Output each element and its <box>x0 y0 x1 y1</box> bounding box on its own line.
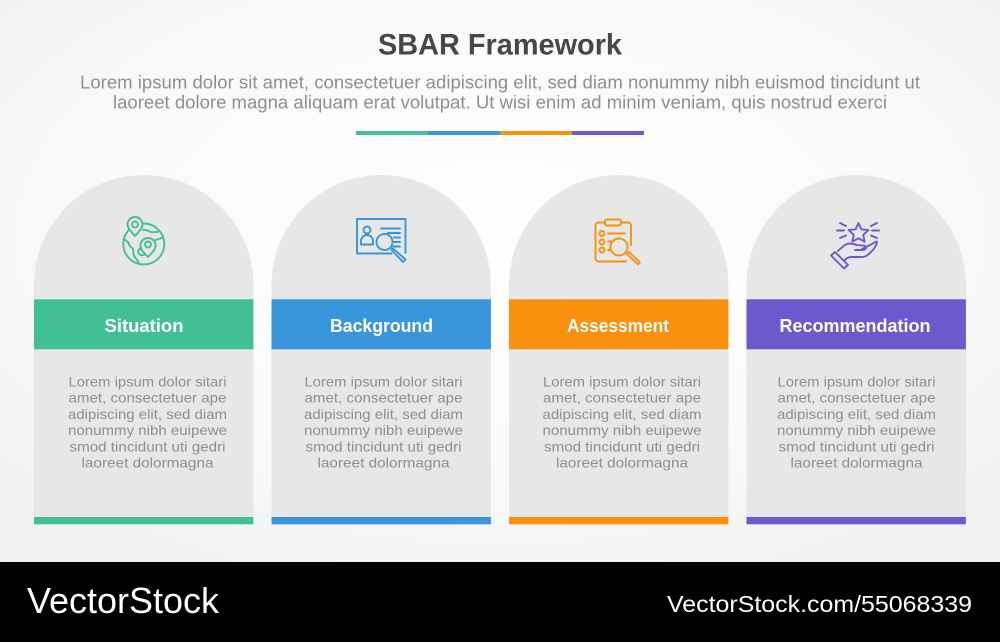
text block: adipiscing elit, sed diam <box>68 406 227 422</box>
text block: laoreet dolormagna <box>82 454 214 470</box>
text block <box>777 374 936 470</box>
text block: amet, consectetuer ape <box>543 390 701 406</box>
text block <box>304 374 463 470</box>
heading: background: Background <box>330 316 433 336</box>
band: assessment <box>509 299 728 349</box>
text block <box>68 374 227 470</box>
icon: clipboard with magnifier <box>596 220 640 264</box>
footer logo text: VectorStock <box>27 580 220 621</box>
card background <box>34 175 253 524</box>
panel: situation <box>34 175 253 524</box>
icon: profile card with magnifier <box>357 219 406 262</box>
heading: recommendation: Recommendation <box>780 316 930 336</box>
bottom bar <box>272 517 491 524</box>
text block: amet, consectetuer ape <box>778 390 936 406</box>
text block: laoreet dolormagna <box>318 454 450 470</box>
footer bar <box>0 562 1000 642</box>
text block <box>542 374 702 470</box>
icon: globe with location pins <box>123 217 164 264</box>
text block: smod tincidunt uti gedri <box>70 438 226 454</box>
bottom bar <box>34 517 253 524</box>
band: situation <box>34 299 253 349</box>
subtitle: Lorem ipsum dolor sit amet, consectetuer adipiscing elit, sed diam nonummy nibh euismod tincidunt ut <box>80 72 920 92</box>
text block: Lorem ipsum dolor sitari <box>778 374 936 390</box>
text block: nonummy nibh euipewe <box>68 422 227 438</box>
text block: adipiscing elit, sed diam <box>542 406 702 422</box>
footer image id: VectorStock.com/55068339 <box>667 591 972 617</box>
text block: smod tincidunt uti gedri <box>306 438 462 454</box>
panel: background <box>272 175 491 524</box>
icon: hand holding star <box>831 223 879 268</box>
band: background <box>272 299 491 349</box>
text block: laoreet dolormagna <box>556 454 688 470</box>
subtitle: laoreet dolore magna aliquam erat volutpat. Ut wisi enim ad minim veniam, quis nostrud exerci <box>113 92 887 112</box>
text block: smod tincidunt uti gedri <box>544 438 700 454</box>
title: SBAR Framework <box>378 28 622 62</box>
text block: laoreet dolormagna <box>790 454 923 470</box>
panel: assessment <box>509 175 728 524</box>
bottom bar <box>746 517 966 524</box>
card background <box>272 175 491 524</box>
bottom bar <box>509 517 728 524</box>
title divider <box>356 131 644 135</box>
card background <box>746 175 966 524</box>
card background <box>509 175 728 524</box>
panel: recommendation <box>746 175 966 524</box>
text block: nonummy nibh euipewe <box>777 422 936 438</box>
text block: amet, consectetuer ape <box>68 390 227 406</box>
text block: Lorem ipsum dolor sitari <box>304 374 462 390</box>
band: recommendation <box>746 299 966 349</box>
text block: nonummy nibh euipewe <box>542 422 702 438</box>
heading: situation: Situation <box>104 316 184 336</box>
text block: amet, consectetuer ape <box>304 390 463 406</box>
text block: nonummy nibh euipewe <box>304 422 463 438</box>
subtitle <box>80 72 920 112</box>
text block: Lorem ipsum dolor sitari <box>68 374 226 390</box>
text block: Lorem ipsum dolor sitari <box>543 374 701 390</box>
text block: smod tincidunt uti gedri <box>778 438 934 454</box>
heading: assessment: Assessment <box>567 316 669 336</box>
text block: adipiscing elit, sed diam <box>304 406 463 422</box>
text block: adipiscing elit, sed diam <box>777 406 936 422</box>
